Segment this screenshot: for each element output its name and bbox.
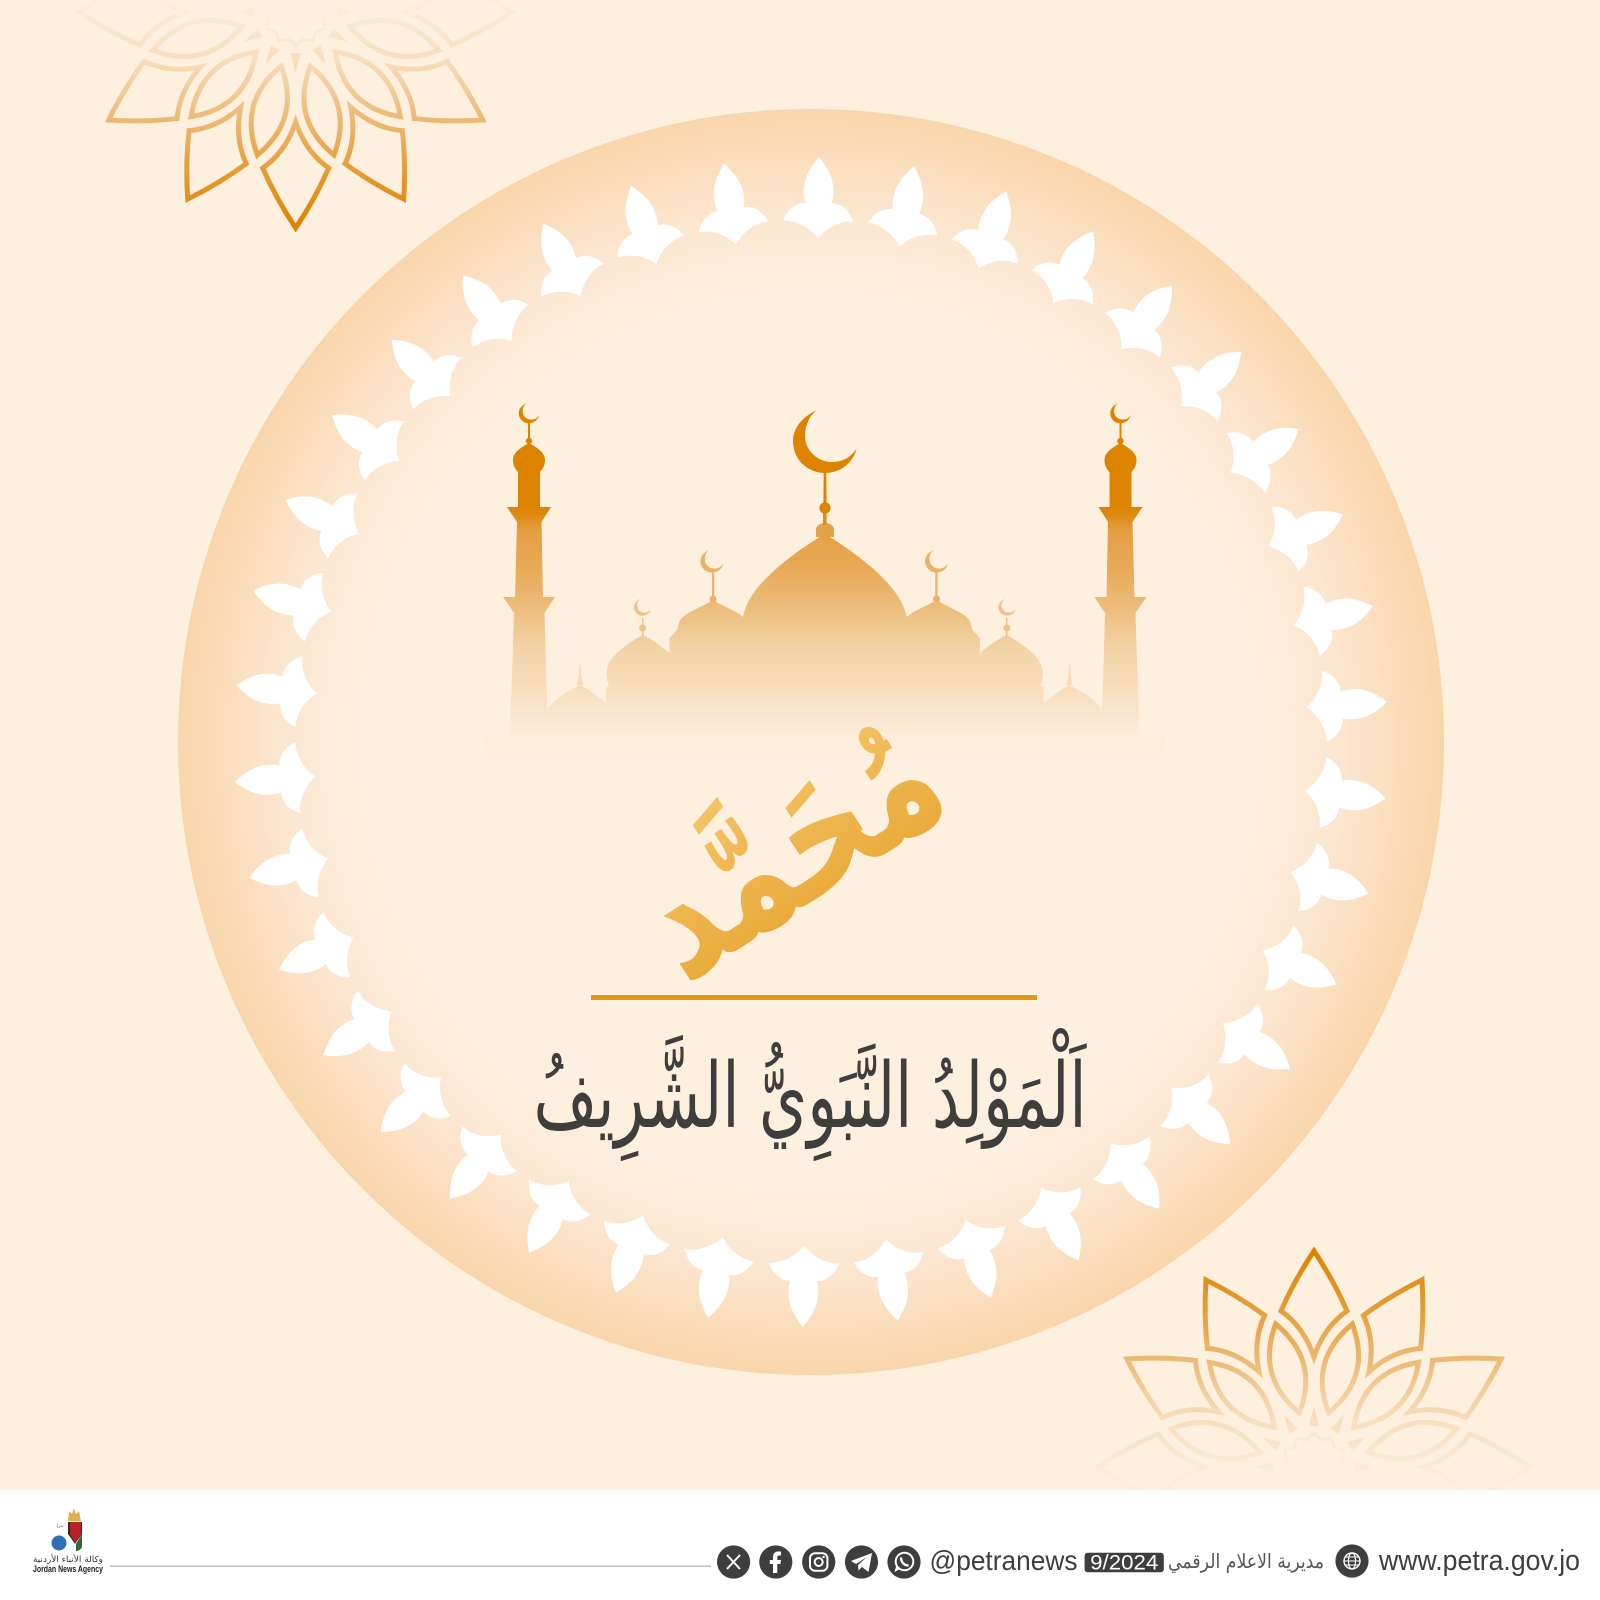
icon: globe: [1335, 1544, 1369, 1578]
social icon: WhatsApp: [887, 1545, 921, 1579]
small crescents: [519, 403, 1131, 616]
footer rule: [110, 1566, 711, 1567]
social icon: Telegram: [845, 1545, 878, 1579]
calligraphy subtitle: اَلْمَوْلِدُ النَّبَوِيُّ الشَّرِيفُ: [534, 1027, 1088, 1162]
logo english name: Jordan News Agency: [33, 1564, 103, 1574]
social icon: Facebook: [759, 1545, 792, 1579]
social icon: Instagram: [802, 1545, 835, 1579]
logo globe: [52, 1536, 66, 1550]
divider line: [591, 995, 1037, 1000]
decorative flower: top left: [46, 0, 546, 242]
mosque left half: [503, 420, 826, 735]
decorative flower: bottom right: [1064, 1237, 1564, 1507]
large peach circle: [178, 109, 1444, 1375]
ring of white fleurons: [233, 157, 1389, 1327]
footer band: [0, 1490, 1600, 1600]
logo flag: [68, 1522, 82, 1544]
mosque silhouette: [484, 403, 1166, 771]
logo arabic name: وكالة الأنباء الأردنية: [33, 1554, 103, 1565]
social icon: X: [717, 1545, 750, 1579]
social handle: @petranews: [930, 1545, 1078, 1576]
department name: مديرية الاعلام الرقمي: [1168, 1549, 1324, 1574]
logo crown: [68, 1508, 81, 1521]
central crescent: [793, 410, 856, 473]
calligraphy: Muhammad: مُحَمَّد: [601, 680, 977, 1018]
mosque right half: [824, 420, 1146, 735]
logo small name: بترا: [56, 1523, 64, 1529]
logo: Jordan News Agency: [33, 1508, 103, 1574]
central dome finial: [816, 472, 834, 537]
date badge: 9/2024: [1090, 1552, 1159, 1574]
website url: www.petra.gov.jo: [1378, 1545, 1580, 1577]
mosque ground base: [484, 735, 1166, 771]
